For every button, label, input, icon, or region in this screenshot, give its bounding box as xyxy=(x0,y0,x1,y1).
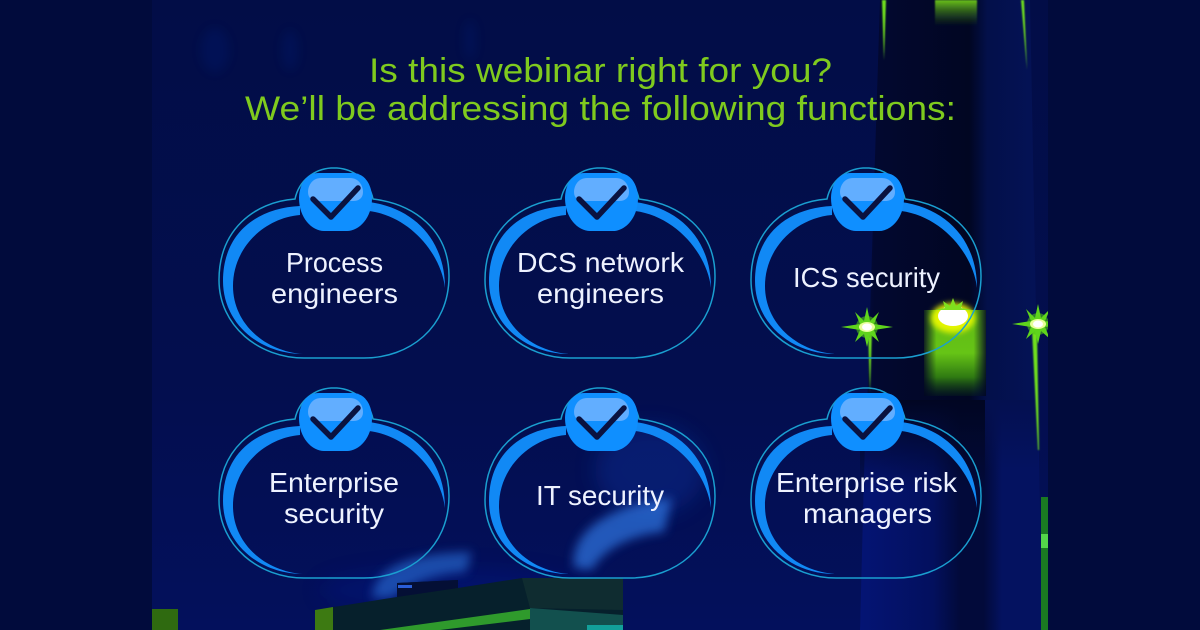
card outline xyxy=(751,168,981,358)
left arc xyxy=(489,426,569,574)
check badge xyxy=(299,173,372,231)
right arc xyxy=(901,202,977,288)
factory building xyxy=(315,578,623,630)
check badge xyxy=(831,173,904,231)
left green block xyxy=(152,609,178,630)
label: Enterprise xyxy=(269,467,399,498)
label: Process xyxy=(286,247,383,278)
card: Enterprise risk managers xyxy=(751,388,981,578)
smoke plumes xyxy=(320,425,705,612)
card outline xyxy=(485,388,715,578)
star light right xyxy=(1012,304,1064,344)
label: DCS network xyxy=(517,247,685,278)
label: managers xyxy=(803,498,932,529)
right arc xyxy=(369,202,445,288)
right arc xyxy=(635,422,711,508)
check badge xyxy=(831,393,904,451)
tower green glow top xyxy=(935,0,977,26)
label: engineers xyxy=(271,278,398,309)
label: Enterprise risk xyxy=(776,467,958,498)
right arc xyxy=(901,422,977,508)
right arc xyxy=(369,422,445,508)
label xyxy=(776,467,958,529)
title xyxy=(245,52,956,128)
chimney tower xyxy=(860,0,1042,630)
faint sky glow xyxy=(201,20,476,72)
label: IT security xyxy=(536,480,664,511)
check badge xyxy=(565,173,638,231)
label xyxy=(269,467,399,529)
card: Enterprise security xyxy=(219,388,449,578)
right arc xyxy=(635,202,711,288)
card outline xyxy=(485,168,715,358)
card outline xyxy=(219,388,449,578)
tower green lit band xyxy=(924,298,986,396)
card: ICS security xyxy=(751,168,981,358)
star light left xyxy=(841,307,893,347)
card: DCS network engineers xyxy=(485,168,715,358)
check badge xyxy=(299,393,372,451)
card: Process engineers xyxy=(219,168,449,358)
left arc xyxy=(489,206,569,354)
label: security xyxy=(284,498,384,529)
title: Is this webinar right for you? xyxy=(369,52,832,90)
label xyxy=(271,247,398,309)
mask beyond photo edge xyxy=(1048,0,1200,630)
left arc xyxy=(223,426,303,574)
left arc xyxy=(755,426,835,574)
left arc xyxy=(755,206,835,354)
check badge xyxy=(565,393,638,451)
card: IT security xyxy=(485,388,715,578)
right green strip xyxy=(1041,497,1048,630)
left arc xyxy=(223,206,303,354)
card outline xyxy=(751,388,981,578)
label xyxy=(517,247,685,309)
title: We’ll be addressing the following functions: xyxy=(245,90,956,128)
label: engineers xyxy=(537,278,664,309)
light streaks xyxy=(868,0,1039,450)
label: ICS security xyxy=(793,262,940,293)
card outline xyxy=(219,168,449,358)
